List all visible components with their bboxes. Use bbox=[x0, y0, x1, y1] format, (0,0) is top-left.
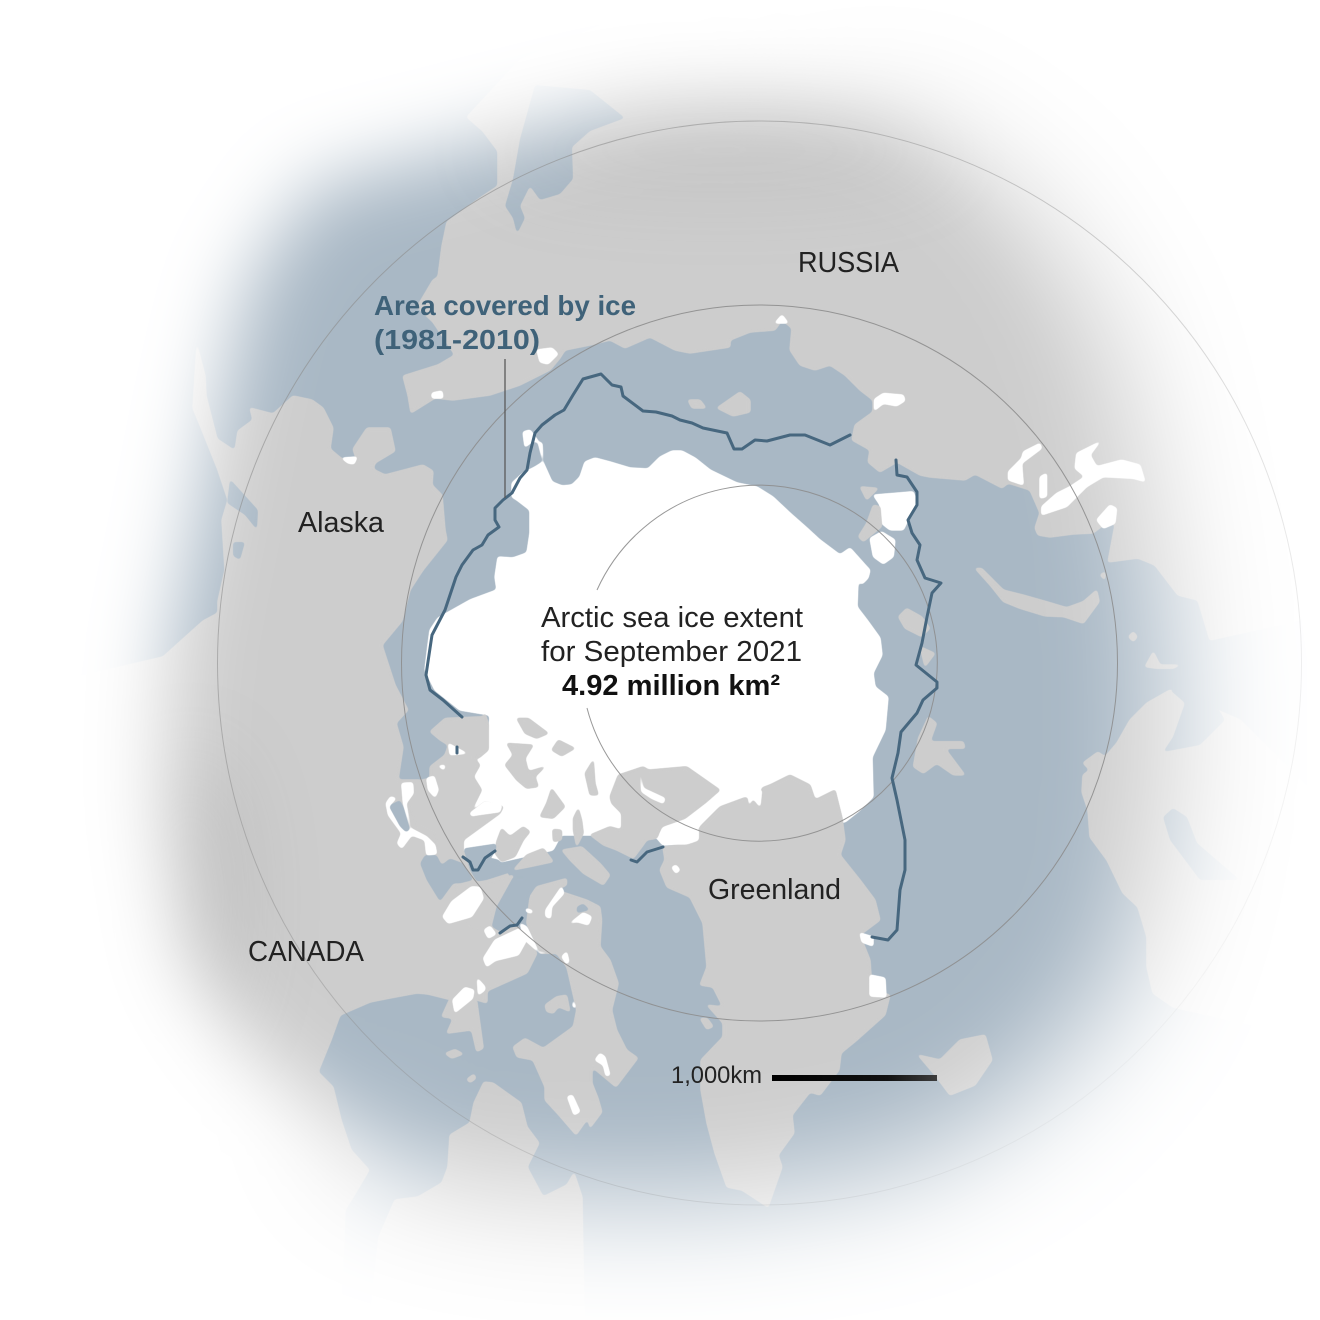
land: Labrador lower bbox=[392, 1082, 583, 1242]
scale bar bbox=[671, 1062, 937, 1089]
land: Svalbard bbox=[913, 717, 965, 775]
shadow: left halo bbox=[145, 750, 235, 1050]
label: Greenland: Greenland bbox=[708, 874, 841, 906]
line fragment: Beaufort channel bbox=[463, 851, 495, 870]
eastern features traced from the zoomed crop bbox=[858, 393, 1180, 775]
land: Alaska and Canada bbox=[138, 360, 538, 1186]
outer circle bbox=[218, 121, 1302, 1205]
ocean: Gulf of Anadyr bbox=[505, 85, 625, 234]
faded base map bbox=[122, 63, 1246, 1274]
ice islets near Greenland and Siberia bbox=[342, 315, 886, 997]
land: Scandinavia and Europe bbox=[1081, 690, 1215, 996]
map bbox=[122, 63, 1246, 1274]
label: Russia: RUSSIA bbox=[798, 247, 900, 279]
islands traced from the zoomed archipelago bbox=[386, 713, 762, 1135]
scale label: 1,000km bbox=[671, 1062, 762, 1089]
land: small Laptev islands bbox=[688, 392, 750, 416]
label: Canada: CANADA bbox=[248, 936, 365, 968]
ocean bbox=[122, 90, 1246, 1274]
land: Novaya Zemlya bbox=[975, 568, 1099, 623]
line fragment: Banks Island bbox=[456, 747, 458, 753]
land: Somerset Island bbox=[510, 875, 514, 879]
land: Russia bbox=[402, 72, 1212, 640]
inner circle bbox=[587, 485, 937, 841]
ocean: Cook Inlet bbox=[227, 479, 258, 530]
subtitle: 1981-2010: (1981-2010) bbox=[374, 324, 540, 355]
land: small bay islands bbox=[445, 995, 713, 1083]
ocean: Bristol Bay bbox=[233, 542, 245, 560]
ocean: channel patches bbox=[387, 800, 590, 932]
title: Area covered by ice: Area covered by ice bbox=[374, 290, 636, 321]
main line: Siberia to Greenland bbox=[872, 460, 941, 940]
callout value: 4.92 million km² bbox=[562, 670, 780, 702]
land: Melville peninsula bbox=[442, 998, 483, 1052]
sea ice: archipelago patches bbox=[386, 743, 762, 1115]
land: Iceland bbox=[918, 1035, 992, 1095]
land: Canadian archipelago bbox=[407, 713, 720, 885]
middle circle bbox=[402, 305, 1118, 1021]
land: Siberian islands bbox=[858, 487, 1180, 668]
main line: Alaska to Siberia bbox=[426, 374, 850, 717]
sea ice: main extent bbox=[425, 430, 888, 862]
scale line bbox=[772, 1075, 937, 1081]
line fragment: Nares Strait bbox=[631, 847, 663, 862]
central callout bbox=[541, 602, 803, 702]
line fragment: Baffin channel bbox=[500, 918, 522, 933]
sea ice: East Siberian and Laptev patches bbox=[870, 393, 1145, 564]
land: Baffin Island and Quebec bbox=[513, 878, 638, 1135]
callout line 2: for September 2021 bbox=[541, 636, 802, 668]
shadow: top halo bbox=[480, 110, 960, 190]
callout line 1: Arctic sea ice extent bbox=[541, 602, 803, 634]
leader line bbox=[504, 359, 506, 498]
latitude circles bbox=[218, 121, 1302, 1205]
ocean: Baltic bbox=[1164, 809, 1204, 878]
ocean: White Sea bbox=[1165, 690, 1215, 751]
ice extent line 1981-2010 bbox=[426, 374, 941, 940]
label: Alaska: Alaska bbox=[298, 507, 385, 539]
land: Greenland bbox=[660, 775, 890, 1207]
